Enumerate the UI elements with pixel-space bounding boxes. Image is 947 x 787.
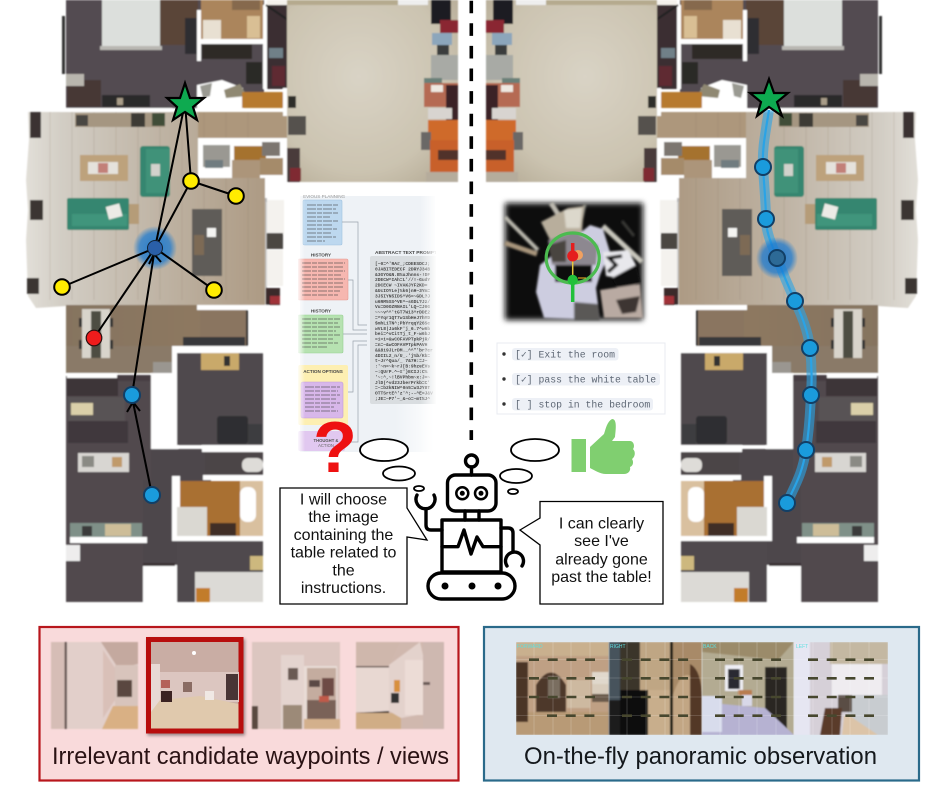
grid lines <box>516 642 888 735</box>
thought bubbles: right <box>500 439 559 494</box>
dining area <box>66 305 246 346</box>
divider: dashed line <box>469 1 473 440</box>
current node <box>769 250 785 266</box>
goal star <box>167 83 204 120</box>
bullets <box>502 352 506 406</box>
glow: current position <box>756 237 798 279</box>
floor plan: left <box>26 0 458 602</box>
item: pass the white table: [✓] pass the white table <box>515 374 656 386</box>
speech bubble: left: the <box>332 562 355 580</box>
view 3 <box>252 642 340 729</box>
garbled prompt text: u6RM5SS^VE^~sGDL?Jz/ <box>375 299 430 305</box>
garbled prompt text: 4DIIL2_n/U_.'j%b/Kb= <box>375 353 430 359</box>
row pills <box>512 348 660 410</box>
speech bubble: right: already gone <box>555 552 648 568</box>
garbled prompt text: 2DCECW ~IVAKJYF2KD= <box>375 283 428 289</box>
connectors <box>342 222 367 442</box>
garbled prompt text: bei=^vCitTj_t_F-w6bJ <box>375 331 430 337</box>
heading: action: ACTION <box>318 443 334 448</box>
goal star <box>750 79 788 116</box>
garbled prompt text: ;JE=~P7'~_&~o=~mt%J^ <box>375 396 430 402</box>
panel: abstract text prompt diagram <box>297 190 438 452</box>
speech bubble: left: containing the <box>294 527 393 544</box>
living room wood floor <box>26 112 287 308</box>
white table <box>78 453 129 472</box>
speech bubble: right: past the table! <box>551 569 652 586</box>
item: exit the room: [✓] Exit the room <box>515 350 615 360</box>
garbled prompt text: =n=~&wCOFAVPTpkPAVH <box>375 342 428 348</box>
label: previous planning: EVIOUS PLANNING <box>303 194 346 199</box>
candidate lines <box>62 103 236 495</box>
garbled prompt text: Vu=D0OZRNAIL'LQ~=J0G <box>375 304 430 310</box>
garbled prompt text: &&8i9JLrDM._^^"'br?cr <box>375 347 433 353</box>
edge fades <box>421 196 436 404</box>
orange sideboard <box>242 92 283 108</box>
living furniture <box>80 155 128 181</box>
panel: irrelevant candidate views <box>40 627 458 780</box>
view labels: RIGHT <box>610 644 626 650</box>
garbled prompt text: ~:QUrP.^~#'}ECIJ:C% <box>375 369 428 375</box>
garbled prompt text: $mhLiTN^;PbYrqqY26Sc <box>375 320 430 326</box>
left wall clutter <box>30 112 41 138</box>
yellow candidate waypoints <box>54 173 244 298</box>
garbled prompt text: t~Jr^Qua/_ 7&7H:=J~ <box>375 358 428 364</box>
purple box <box>301 382 343 418</box>
path nodes <box>755 159 819 511</box>
pano view A <box>516 642 609 735</box>
thought box <box>298 431 345 451</box>
heading: history: HISTORY <box>311 308 331 314</box>
speech bubble: left: table related to <box>291 544 397 562</box>
garbled prompt text: &3GYO&N.B%uJhnns-!DF <box>375 272 430 278</box>
pano view C <box>702 642 794 735</box>
glow: current position <box>133 226 177 270</box>
pano view B <box>609 642 702 735</box>
speech bubble: left: I will choose <box>300 492 387 508</box>
garbled prompt text: =^Yqr1QT7w1SbHeJ7hYD <box>375 315 430 321</box>
current position node <box>148 240 162 256</box>
speech bubble: left: instructions. <box>301 580 386 597</box>
toilet room <box>202 445 263 452</box>
panel: panoramic observation <box>484 627 919 780</box>
speech bubble: right: I can clearly <box>559 516 644 532</box>
red marker <box>567 243 583 262</box>
lower hallway floor <box>66 376 151 602</box>
view 1 <box>51 642 138 729</box>
shelf <box>70 523 142 537</box>
green marker <box>568 275 586 302</box>
heading: history: HISTORY <box>311 252 331 258</box>
box scribbles <box>302 205 345 411</box>
garbled prompt text: &UcIOYLe)%k6)nH~3Ym= <box>375 288 430 294</box>
heading: thought and action: THOUGHT & <box>314 438 338 443</box>
green box <box>298 315 343 353</box>
icon: thumbs up <box>572 419 635 474</box>
garbled prompt text: OTTSrtE^'z'^;--^E=J&V <box>375 391 433 397</box>
upper right room <box>177 353 263 445</box>
view 2 (selected) <box>148 640 241 731</box>
garbled prompt text: wVL8|Ja6kF'j_6.7^w6b <box>375 326 430 332</box>
blue box <box>303 200 342 245</box>
icon: robot <box>416 455 524 599</box>
panel: top-down observation <box>505 203 643 320</box>
heading: abstract text prompt: ABSTRACT TEXT PROMPT <box>375 250 437 256</box>
grid dashes <box>529 660 874 716</box>
garbled prompt text <box>375 261 433 402</box>
caption: Irrelevant candidate waypoints / views <box>52 743 449 770</box>
right trajectory <box>750 79 819 511</box>
garbled prompt text: '~:^,~!lBVPhbm~x:J=~ <box>375 374 430 380</box>
center room floor <box>287 0 458 182</box>
garbled prompt text: JlD(^vd23JberPrkb=C' <box>375 380 430 386</box>
floor plan: right (mirrored) <box>486 0 918 602</box>
green heading circle <box>546 233 599 283</box>
heading: action options: ACTION OPTIONS <box>303 369 343 374</box>
gray prompt box <box>370 256 431 404</box>
view labels <box>517 644 808 648</box>
side room <box>198 138 287 178</box>
garbled prompt text: =i=i=&wCOFAVPTpkPjR/ <box>375 337 430 343</box>
tan room <box>172 476 180 540</box>
red box <box>298 259 348 300</box>
bedroom floor <box>66 0 264 108</box>
speech bubble: left: the image <box>308 509 379 526</box>
garbled prompt text: :'~n=~k~rJ[B:9hzeEVs <box>375 364 430 370</box>
heading line <box>572 256 574 280</box>
speech bubble: left <box>280 488 427 604</box>
blue waypoints <box>124 387 160 503</box>
caption: On-the-fly panoramic observation <box>524 743 877 770</box>
bottom room <box>177 541 263 602</box>
left trajectory <box>54 83 244 503</box>
path ribbon <box>763 110 812 503</box>
speech bubble: right <box>520 502 663 604</box>
red question mark: ? <box>313 408 357 488</box>
view labels: BACK <box>703 644 717 650</box>
thought bubbles: left <box>360 439 424 491</box>
item: stop in the bedroom: [ ] stop in the bedroom <box>515 400 650 410</box>
garbled prompt text: ~~~v^^'tGT7W13^rDDE2 <box>375 310 430 316</box>
garbled prompt text: 0JABITEDECF 2DRYJ34B <box>375 266 430 272</box>
view labels: FORWARD <box>517 644 543 650</box>
garbled prompt text: [~0=^'RA#_;CDEESDCJ; <box>375 261 430 267</box>
furniture column <box>431 0 451 24</box>
speech bubble: right: see I've <box>574 533 629 550</box>
garbled prompt text: =~=b2kNIW^0n5=w3JY8T <box>375 385 430 391</box>
yellow box: action options <box>298 365 348 425</box>
view 4 <box>356 642 444 729</box>
pano view D <box>794 642 888 735</box>
garbled prompt text: 2DECW^IAh=L'//!-GudY <box>375 277 430 283</box>
garbled prompt text: 3J5IYN5IDS^V6=~GDL?J <box>375 293 430 299</box>
view labels: LEFT <box>796 644 808 650</box>
red chosen waypoint <box>86 330 102 346</box>
checklist <box>497 343 665 414</box>
